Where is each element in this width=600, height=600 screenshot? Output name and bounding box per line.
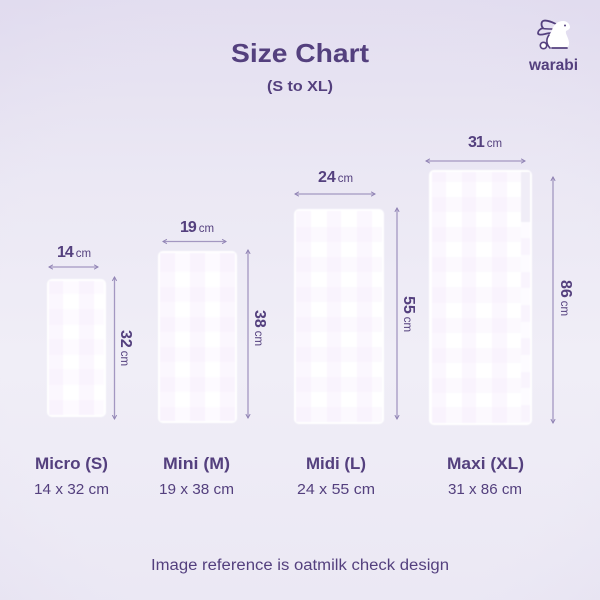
name label: Maxi (XL) bbox=[447, 455, 524, 473]
height arrow bbox=[552, 177, 554, 423]
width value: 19 cm bbox=[180, 219, 214, 236]
subtitle: (S to XL) bbox=[267, 78, 333, 95]
width arrow bbox=[163, 240, 226, 242]
height value: 86 cm bbox=[557, 280, 574, 316]
fabric card: Midi bbox=[294, 209, 384, 424]
dimensions label: 14 x 32 cm bbox=[34, 481, 109, 498]
size: Micro (S) bbox=[34, 244, 134, 498]
footnote: Image reference is oatmilk check design bbox=[151, 557, 449, 574]
title: Size Chart bbox=[231, 38, 369, 68]
icon: rabbit bbox=[538, 21, 570, 49]
dimensions label: 31 x 86 cm bbox=[448, 481, 522, 498]
fabric card: Mini bbox=[158, 251, 237, 423]
size: Mini (M) bbox=[158, 219, 268, 498]
fabric card: Maxi bbox=[429, 170, 532, 425]
height arrow bbox=[396, 208, 398, 419]
width arrow bbox=[295, 193, 375, 195]
dimensions label: 19 x 38 cm bbox=[159, 481, 234, 498]
width arrow bbox=[426, 160, 525, 162]
width value: 14 cm bbox=[57, 244, 91, 261]
height arrow bbox=[114, 277, 116, 419]
fabric card: Micro bbox=[47, 279, 106, 417]
name label: Midi (L) bbox=[306, 455, 366, 473]
size: Maxi (XL) bbox=[426, 134, 574, 498]
width value: 24cm bbox=[318, 169, 353, 186]
height value: 38 cm bbox=[251, 310, 268, 346]
name label: Micro (S) bbox=[35, 455, 108, 473]
dimensions label: 24 x 55 cm bbox=[297, 481, 375, 498]
size: Midi (L) bbox=[294, 169, 417, 498]
height value: 55 cm bbox=[400, 296, 417, 332]
height arrow bbox=[247, 250, 249, 418]
logo wordmark: warabi bbox=[528, 57, 578, 74]
name label: Mini (M) bbox=[163, 455, 230, 473]
logo: warabi bbox=[528, 21, 578, 74]
width value: 31 cm bbox=[468, 134, 502, 151]
height value: 32 cm bbox=[117, 330, 134, 366]
width arrow bbox=[49, 266, 98, 268]
